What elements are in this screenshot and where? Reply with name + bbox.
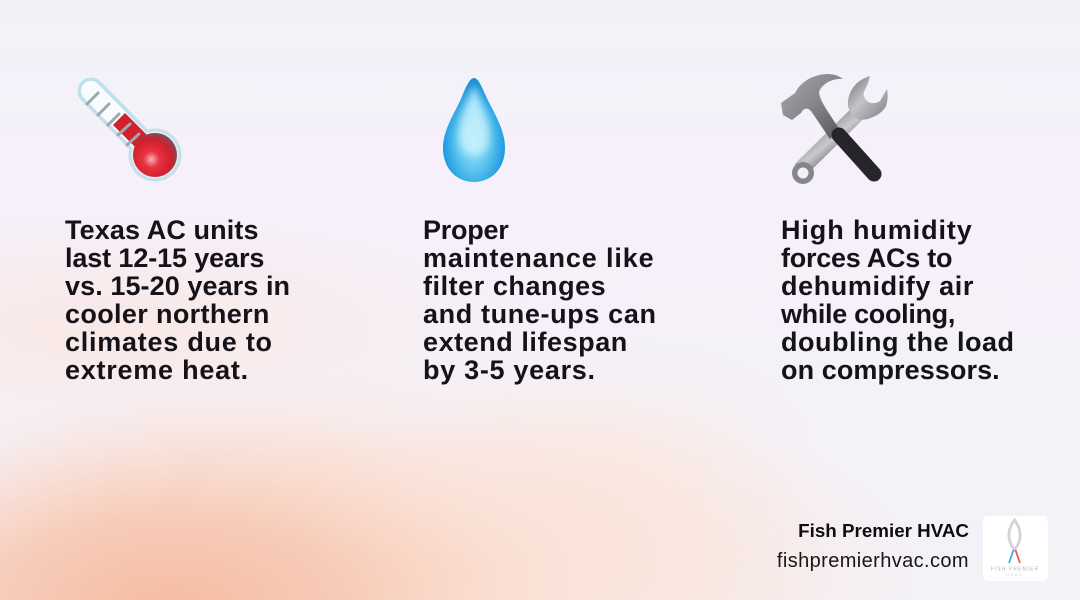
text block: maintenance: filter changes: [423, 271, 606, 301]
text block: maintenance: Proper: [423, 215, 509, 245]
text block: humidity: doubling the load: [781, 327, 1014, 357]
text block: Texas heat: cooler northern: [65, 299, 270, 329]
text block: humidity: forces ACs to: [781, 243, 952, 273]
text block: humidity: on compressors.: [781, 355, 1000, 385]
text block: Texas heat: Texas AC units: [65, 215, 259, 245]
text block: maintenance: by 3-5 years.: [423, 355, 596, 385]
text block: maintenance: maintenance like: [423, 243, 655, 273]
text block: humidity: [780, 215, 1014, 385]
text block: humidity: while cooling,: [781, 299, 955, 329]
text block: Texas heat: last 12-15 years: [65, 243, 264, 273]
text block: maintenance: extend lifespan: [423, 327, 628, 357]
logo: HVAC: [1006, 573, 1024, 577]
text block: Texas heat: vs. 15-20 years in: [65, 271, 290, 301]
brand name: Fish Premier HVAC: [798, 520, 969, 541]
logo: [983, 516, 1048, 581]
logo: FISH PREMIER: [991, 566, 1039, 572]
icon: water drop: [443, 78, 505, 182]
icon: hammer and wrench: [781, 74, 888, 184]
text block: Texas heat: [65, 215, 290, 385]
hammer: [781, 74, 874, 174]
text block: Texas heat: extreme heat.: [65, 355, 249, 385]
text block: humidity: High humidity: [781, 215, 973, 245]
text block: humidity: dehumidify air: [781, 271, 974, 301]
text block: Texas heat: climates due to: [65, 327, 273, 357]
website: fishpremierhvac.com: [777, 550, 969, 572]
text block: maintenance: and tune-ups can: [423, 299, 657, 329]
icon: thermometer: [78, 78, 182, 182]
wrench: [792, 76, 888, 184]
text block: maintenance: [423, 215, 657, 385]
